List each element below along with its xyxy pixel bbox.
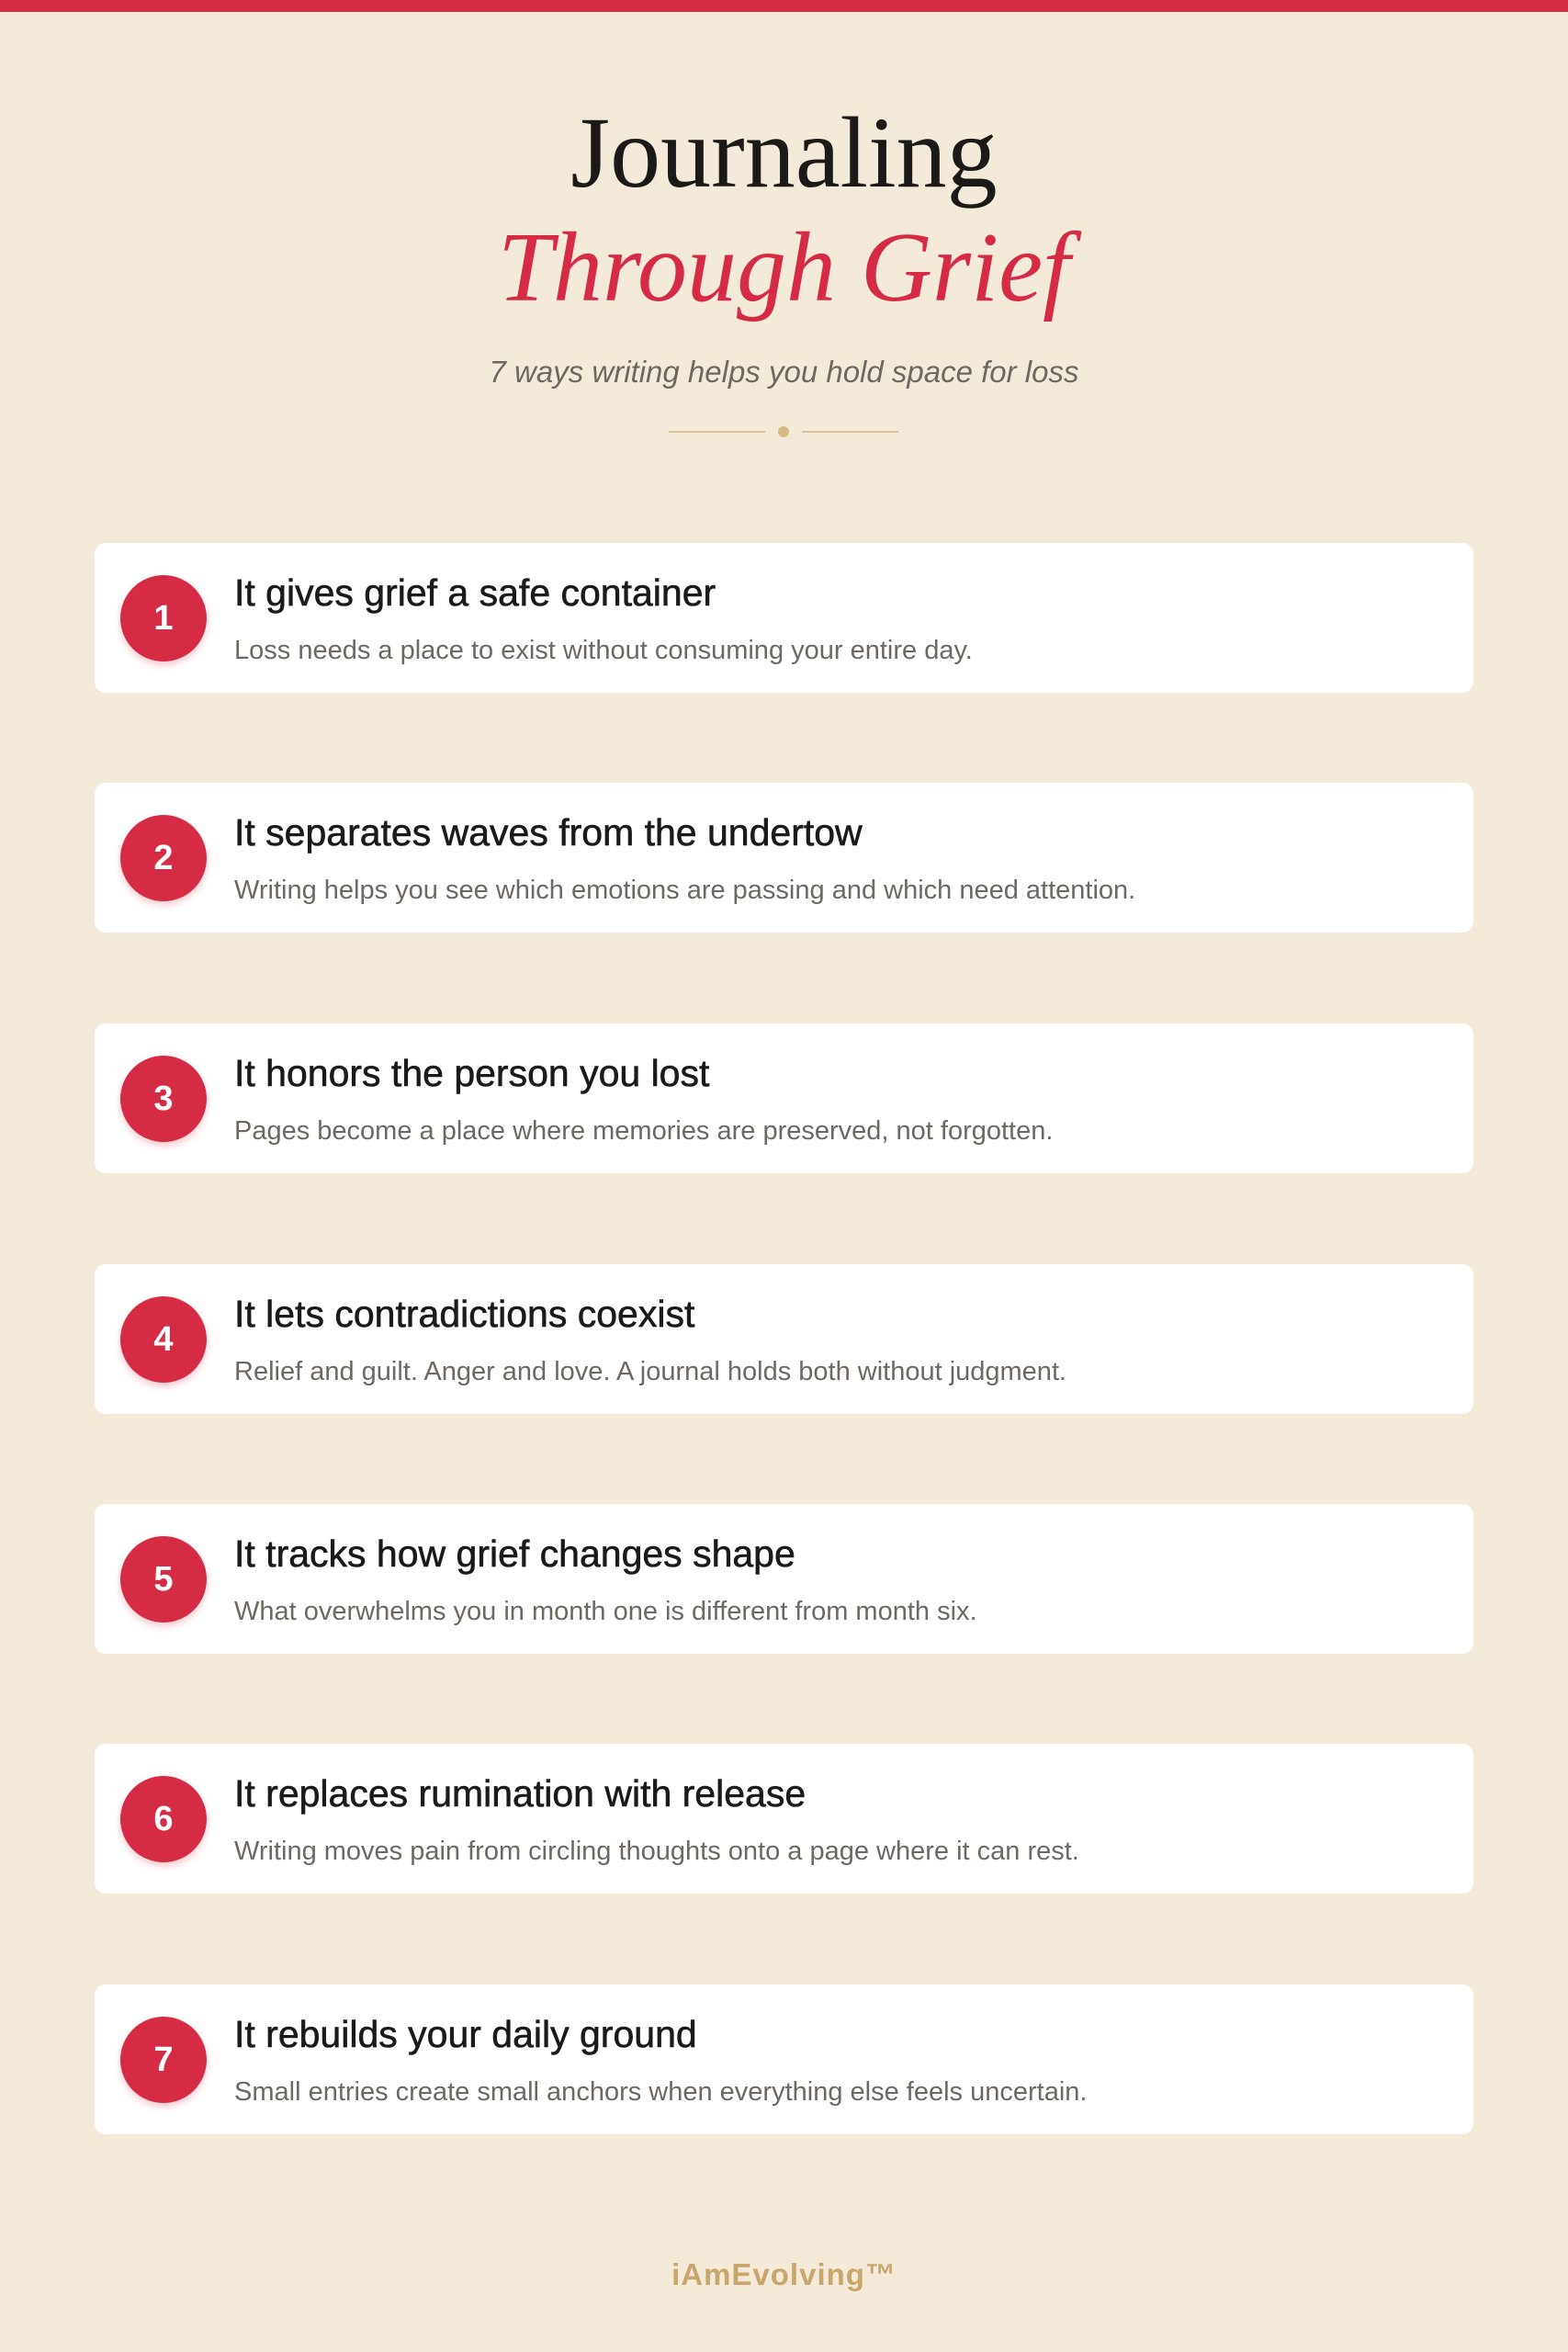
title accent: Through Grief [498,213,1070,322]
card 1: It gives grief a safe container [234,571,716,614]
card 6: 6 [153,1800,174,1838]
card 1: Loss needs a place to exist without consuming your entire day. [234,636,973,665]
card 3 [95,1023,1473,1173]
card 2: 2 [153,839,174,877]
divider ornament [669,426,898,437]
card 7 [95,1984,1473,2134]
card 5: What overwhelms you in month one is different from month six. [234,1597,977,1626]
card 6 [95,1744,1473,1894]
card 6: Writing moves pain from circling thoughts onto a page where it can rest. [234,1837,1079,1866]
card 3: It honors the person you lost [234,1052,709,1094]
card 7: It rebuilds your daily ground [234,2013,697,2055]
card 7: 7 [153,2041,174,2079]
card 4: 4 [153,1320,174,1359]
footer brand: iAmEvolving™ [671,2257,897,2291]
card 2: It separates waves from the undertow [234,811,863,854]
card 2 [95,783,1473,933]
card 1: 1 [153,599,174,638]
card 3: 3 [153,1080,174,1118]
card 7: Small entries create small anchors when everything else feels uncertain. [234,2077,1087,2107]
card 4: It lets contradictions coexist [234,1293,694,1335]
card 2: Writing helps you see which emotions are passing and which need attention. [234,876,1135,905]
card 3: Pages become a place where memories are preserved, not forgotten. [234,1116,1053,1146]
card 4: Relief and guilt. Anger and love. A journal holds both without judgment. [234,1357,1066,1386]
card 5: It tracks how grief changes shape [234,1532,795,1575]
card 1 [95,543,1473,693]
title: Journaling [570,96,998,209]
card 5 [95,1504,1473,1654]
card 5: 5 [153,1560,174,1599]
subtitle: 7 ways writing helps you hold space for loss [489,355,1078,389]
card 6: It replaces rumination with release [234,1772,806,1815]
card 4 [95,1264,1473,1414]
